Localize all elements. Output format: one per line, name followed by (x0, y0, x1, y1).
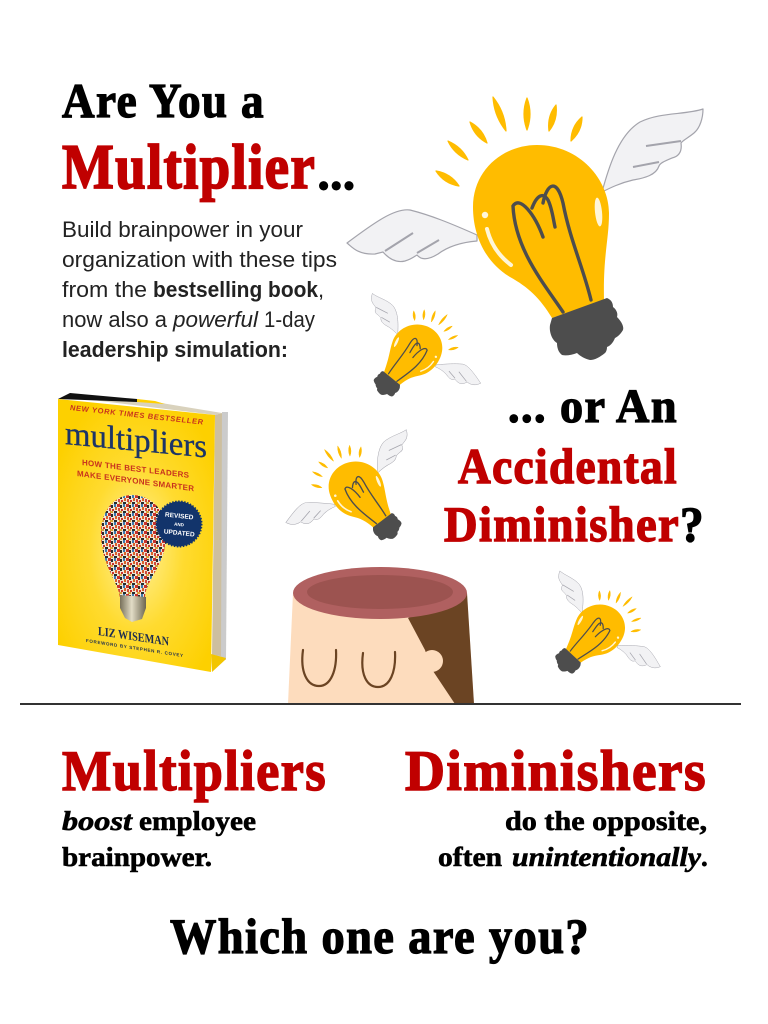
text block: intro: organization with these tips (62, 247, 337, 272)
heading: or An Accidental Diminisher: ... or An (508, 380, 678, 433)
heading: Are You a Multiplier: ... (318, 148, 356, 199)
heading: Are You a Multiplier: Multiplier (62, 132, 316, 202)
panel: Multipliers: boost (62, 806, 134, 836)
icon: small flying bulb middle (269, 425, 436, 567)
panel: Diminishers: often (438, 842, 502, 872)
panel: Diminishers: Diminishers (405, 740, 707, 803)
panel: Diminishers: do the opposite, (505, 806, 707, 836)
panel: Diminishers: unintentionally (512, 842, 702, 872)
heading: Are You a Multiplier: Are You a (62, 73, 265, 128)
text block: intro: 1-day (264, 307, 315, 332)
panel: Multipliers (62, 740, 327, 872)
text block: intro: bestselling book (153, 277, 319, 302)
heading: or An Accidental Diminisher: ? (680, 496, 705, 552)
heading: or An Accidental Diminisher: Diminisher (444, 496, 680, 552)
text block: intro: , (318, 277, 324, 302)
book cover: Multipliers (58, 393, 228, 672)
icon: small flying bulb lower (524, 567, 681, 706)
heading: or An Accidental Diminisher (444, 380, 705, 552)
heading: Are You a Multiplier (62, 73, 356, 202)
heading: or An Accidental Diminisher: Accidental (458, 438, 678, 494)
book cover: Multipliers: MAKE EVERYONE SMARTER (77, 469, 194, 493)
icon: large flying light bulb (347, 97, 703, 360)
book cover: Multipliers: FOREWORD BY STEPHEN R. COVEY (86, 638, 183, 658)
text block: intro: Build brainpower in your (62, 217, 303, 242)
book cover: Multipliers: REVISED (165, 512, 194, 522)
book cover: Multipliers: LIZ WISEMAN (98, 624, 169, 649)
book cover: Multipliers: multipliers (65, 416, 207, 465)
divider line (20, 703, 741, 705)
panel: Diminishers (405, 740, 708, 872)
illustration: open head (288, 567, 474, 704)
text block: intro: powerful (172, 307, 259, 332)
book cover: Multipliers: NEW YORK TIMES BESTSELLER (70, 403, 204, 427)
text block: intro: now also a (62, 307, 168, 332)
closing question: Which one are you? (170, 908, 590, 964)
text block: intro (62, 217, 337, 362)
text block: intro: leadership simulation: (62, 337, 288, 362)
book cover: Multipliers: AND (174, 522, 185, 528)
book cover: Multipliers: HOW THE BEST LEADERS (82, 458, 190, 480)
text block: intro: from the (62, 277, 147, 302)
icon: small flying bulb upper (342, 289, 498, 424)
panel: Diminishers: . (701, 842, 708, 872)
panel: Multipliers: Multipliers (62, 740, 327, 803)
panel: Multipliers: brainpower. (62, 842, 212, 872)
book cover: Multipliers: UPDATED (163, 528, 195, 539)
panel: Multipliers: employee (139, 806, 256, 836)
